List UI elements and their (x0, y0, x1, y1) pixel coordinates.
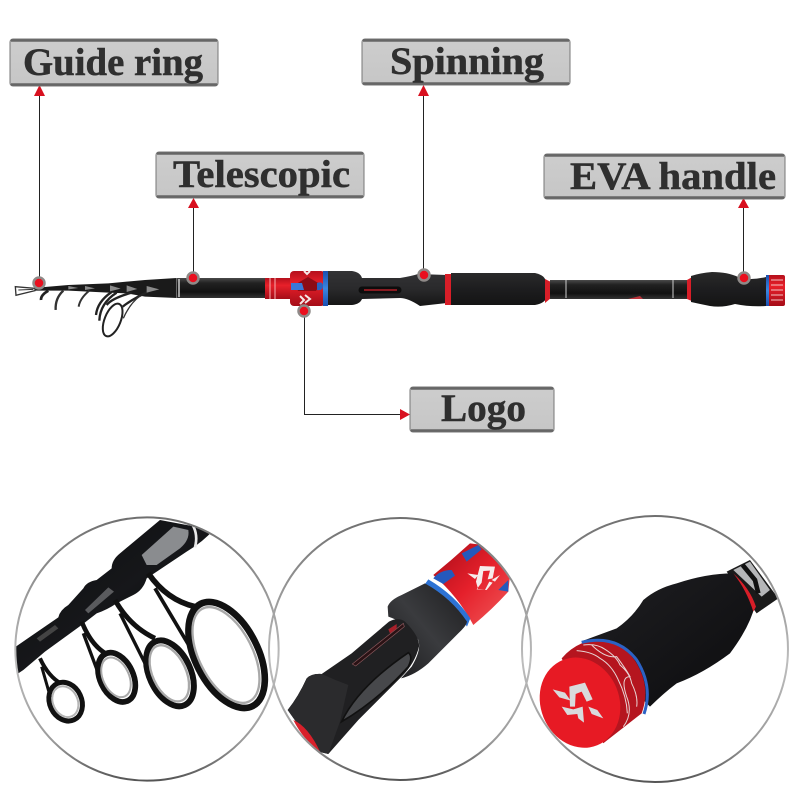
label: Guide ring: Guide ring (23, 41, 203, 84)
guide ring, smallest (40, 658, 89, 727)
grip collar (388, 583, 467, 678)
fishing rod, full view (15, 271, 785, 339)
slit highlight (342, 653, 411, 722)
red ring (445, 274, 451, 305)
label: Spinning (362, 39, 570, 85)
red winding (545, 279, 551, 303)
label: Spinning: Spinning (390, 40, 545, 83)
logo on cap (553, 683, 603, 723)
butt cap (766, 275, 785, 306)
cap side (562, 641, 645, 743)
telescopic tip with guides (15, 278, 177, 339)
rod blank, lower section (177, 278, 267, 298)
red collar (265, 278, 291, 299)
blue ring (323, 271, 328, 306)
blank section (727, 560, 778, 613)
grip body (328, 271, 447, 306)
red hood (433, 543, 510, 625)
guide ring, large (146, 572, 268, 712)
circle detail: guide rings (13, 517, 281, 781)
rod shaft (550, 280, 688, 299)
label: Logo: Logo (441, 387, 526, 430)
blue ring (424, 579, 470, 627)
circle detail: reel seat and grip (269, 518, 531, 780)
label: Logo (410, 387, 554, 432)
red butt ring (293, 720, 320, 752)
cap face (540, 658, 620, 748)
guide ring, third (82, 622, 143, 708)
EVA foam fore grip (451, 273, 546, 305)
EVA foam grip (583, 573, 755, 707)
EVA rear handle (691, 272, 766, 307)
blue ring (582, 640, 647, 714)
logo on hood (467, 566, 500, 590)
leader lines and arrows (34, 85, 749, 420)
text plate (352, 623, 404, 666)
callout markers (34, 270, 750, 316)
label: Telescopic: Telescopic (173, 153, 350, 196)
circle detail: EVA handle and butt cap (522, 516, 788, 782)
wire pattern (577, 645, 637, 727)
reel seat: red hood and logo (290, 271, 325, 306)
red winding (733, 573, 756, 612)
red winding rear (687, 276, 694, 302)
label: EVA handle: EVA handle (570, 155, 776, 198)
telescopic tube (13, 520, 213, 677)
grip body (288, 619, 419, 754)
guide ring, second (115, 600, 204, 714)
